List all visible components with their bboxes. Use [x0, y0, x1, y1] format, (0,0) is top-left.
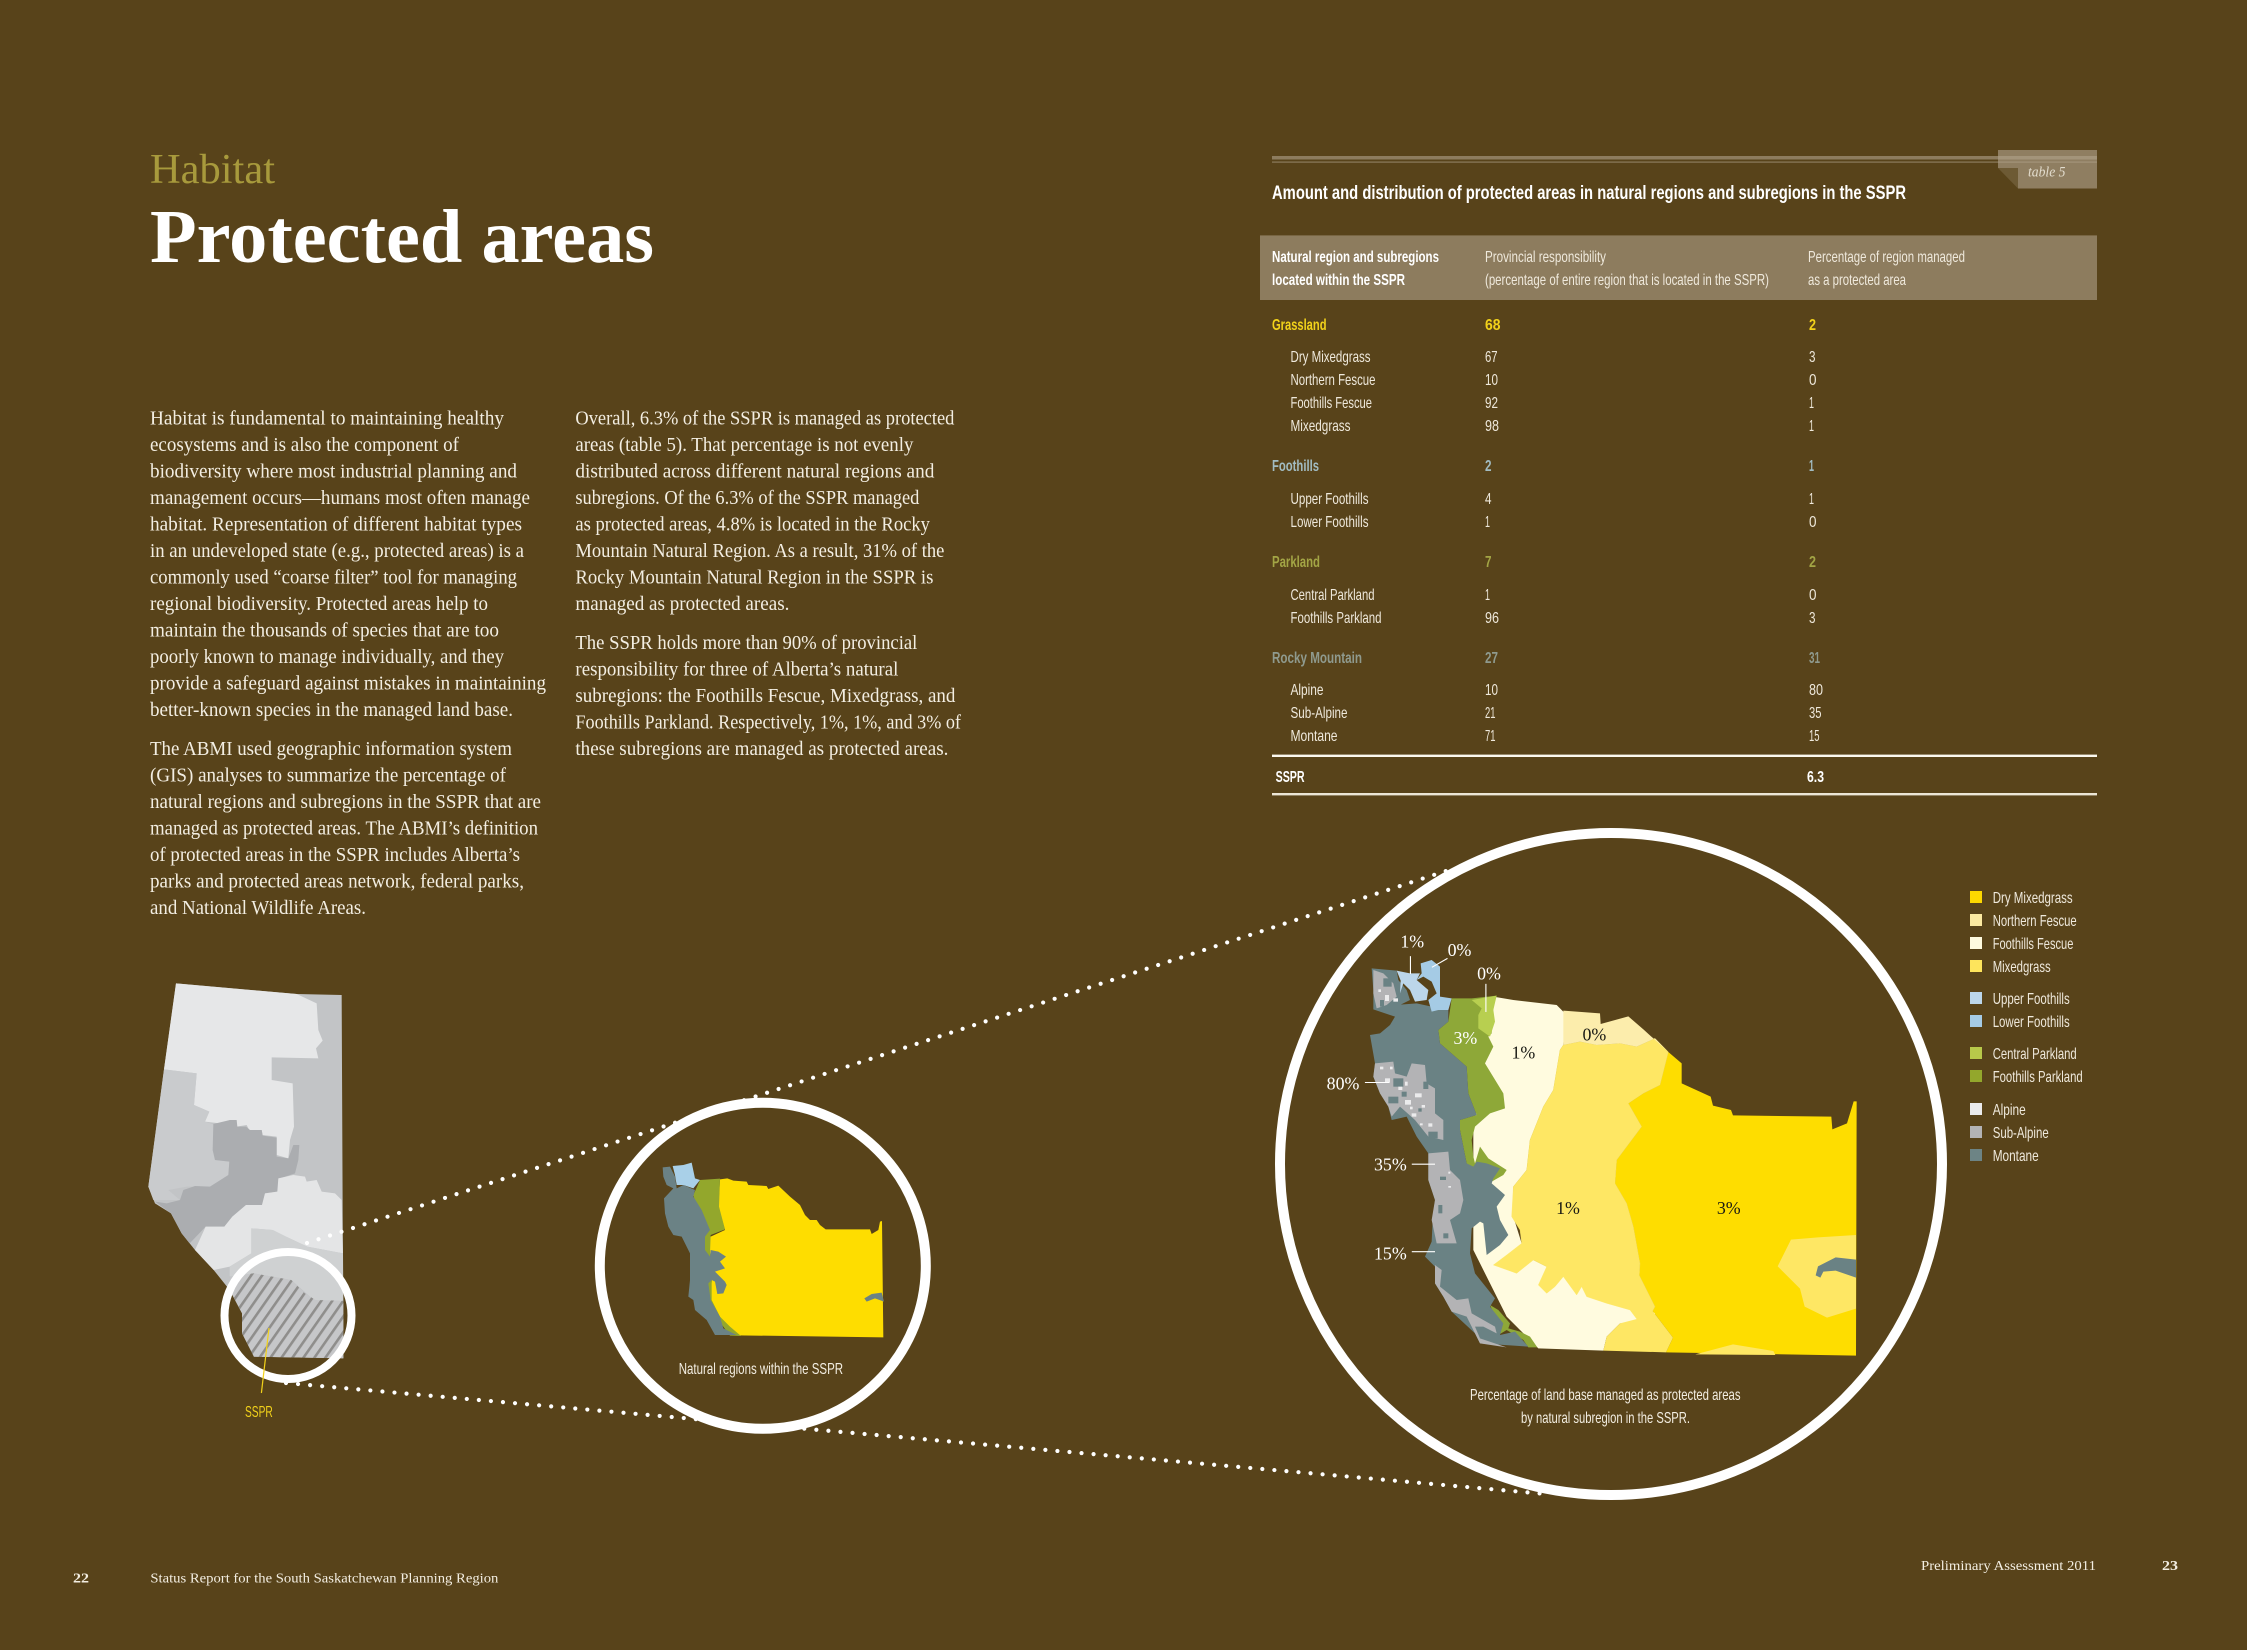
table group: Grassland: 1 — [1809, 395, 1814, 412]
region: Foothills Parkland — [1438, 996, 1507, 1183]
percentage labels: 0% — [1448, 940, 1472, 960]
region: Sub-Alpine — [1373, 970, 1507, 1347]
percentage labels: 0% — [1477, 963, 1501, 983]
text block: right column: Mountain Natural Region. As a result, 31% of the — [575, 541, 944, 562]
table group: Foothills: 1 — [1809, 458, 1814, 475]
table group: Rocky Mountain: 80 — [1809, 682, 1823, 699]
footer: left page: 22 — [73, 1570, 89, 1586]
table group: Grassland: 2 — [1809, 317, 1816, 334]
table header band: Provincial responsibility — [1485, 249, 1606, 266]
text block: left column: of protected areas in the SSPR includes Alberta’s — [150, 845, 520, 866]
percentage labels: 80% — [1327, 1074, 1360, 1094]
caption: percentage of land base: by natural subregion in the SSPR. — [1521, 1410, 1690, 1427]
map: Alberta province — [148, 983, 343, 1358]
table group: Parkland: Central Parkland — [1290, 587, 1374, 604]
caption: percentage of land base: Percentage of land base managed as protected areas — [1470, 1387, 1740, 1404]
table group: Grassland: Grassland — [1272, 317, 1326, 334]
text block: left column: ecosystems and is also the component of — [150, 435, 459, 456]
table group: Foothills: Foothills — [1272, 458, 1319, 475]
region: Mixedgrass — [1493, 1038, 1668, 1323]
circle panel: percent protected by subregion — [1280, 833, 1942, 1495]
map: natural regions within the SSPR — [663, 1163, 884, 1337]
text block: left column: provide a safeguard against mistakes in maintaining — [150, 673, 546, 694]
region: eastern Mixedgrass — [1778, 1235, 1856, 1318]
table group: Parkland: 3 — [1809, 610, 1816, 627]
text block: left column: managed as protected areas. The ABMI’s definition — [150, 818, 538, 840]
region: Central Parkland — [1472, 996, 1497, 1037]
text block: left column: parks and protected areas network, federal parks, — [150, 872, 524, 892]
text block: left column: commonly used “coarse filter” tool for managing — [150, 567, 517, 588]
caption: natural regions: Natural regions within the SSPR — [679, 1361, 843, 1378]
table header band: as a protected area — [1808, 272, 1906, 289]
table header band: (percentage of entire region that is located in the SSPR) — [1485, 272, 1769, 289]
footer: right page — [1921, 1558, 2178, 1573]
table group: Foothills: Upper Foothills — [1290, 491, 1368, 508]
dotted connector: lower — [286, 1383, 1546, 1494]
table group: Grassland — [1272, 317, 1817, 435]
dotted connector: upper — [307, 869, 1452, 1243]
table group: Parkland — [1272, 554, 1817, 627]
table group: Grassland: 3 — [1809, 349, 1816, 366]
legend: Montane — [1993, 1148, 2039, 1165]
text block: right column: as protected areas, 4.8% is located in the Rocky — [575, 514, 930, 535]
text block: right column: Overall, 6.3% of the SSPR is managed as protected — [575, 408, 955, 429]
legend: Foothills Fescue — [1993, 936, 2073, 953]
region: Northern Fescue south — [1603, 1311, 1673, 1352]
table group: Grassland: Mixedgrass — [1290, 418, 1350, 435]
region: Montane — [1370, 968, 1528, 1347]
table group: Rocky Mountain: 35 — [1809, 705, 1822, 722]
legend: Sub-Alpine — [1993, 1125, 2049, 1142]
caption: percentage of land base — [1470, 1387, 1740, 1427]
region: southern Mixedgrass sliver — [1695, 1344, 1775, 1355]
text block: right column: managed as protected areas. — [575, 594, 789, 615]
legend: Upper Foothills — [1993, 991, 2070, 1008]
region: Sub-Alpine gaps — [1380, 978, 1463, 1238]
percentage labels: 15% — [1374, 1244, 1407, 1264]
text block: left column: natural regions and subregions in the SSPR that are — [150, 792, 541, 813]
text block: right column: The SSPR holds more than 90% of provincial — [575, 633, 918, 654]
table group: Parkland: 7 — [1485, 554, 1492, 571]
region: Alpine — [1378, 989, 1451, 1188]
table group: Parkland: 0 — [1809, 587, 1817, 604]
legend: Mixedgrass — [1993, 959, 2051, 976]
table group: Parkland: 1 — [1485, 587, 1490, 604]
table title: Amount and distribution of protected areas in natural regions and subregions in the SSPR — [1272, 183, 1906, 204]
table group: Grassland: 92 — [1485, 395, 1498, 412]
table group: Rocky Mountain: 15 — [1809, 728, 1820, 745]
footer: right page: Preliminary Assessment 2011 — [1921, 1558, 2096, 1573]
table total row: SSPR: 6.3 — [1807, 769, 1824, 786]
text block: right column: distributed across different natural regions and — [575, 461, 935, 482]
region: Upper Foothills — [1397, 971, 1428, 1002]
table group: Foothills: 2 — [1485, 458, 1492, 475]
text block: left column: poorly known to manage individually, and they — [150, 647, 504, 668]
table group: Parkland: Foothills Parkland — [1290, 610, 1382, 627]
legend: Alpine — [1993, 1102, 2026, 1119]
table header band: Natural region and subregions — [1272, 249, 1439, 266]
percentage labels: 0% — [1582, 1025, 1606, 1045]
table group: Foothills: 1 — [1809, 491, 1814, 508]
table header band: Percentage of region managed — [1808, 249, 1965, 266]
leader: SSPR — [261, 1328, 269, 1393]
text block: left column: Habitat is fundamental to maintaining healthy — [150, 408, 504, 429]
footer: right page: 23 — [2162, 1558, 2178, 1573]
table group: Foothills: Lower Foothills — [1290, 514, 1368, 531]
text block: left column: habitat. Representation of different habitat types — [150, 514, 522, 535]
footer: left page: Status Report for the South Saskatchewan Planning Region — [150, 1570, 499, 1586]
percentage labels — [1327, 932, 1741, 1264]
table group: Foothills: 1 — [1485, 514, 1490, 531]
table group: Rocky Mountain: 10 — [1485, 682, 1498, 699]
text block: left column: biodiversity where most industrial planning and — [150, 461, 517, 482]
text block: left column — [150, 408, 546, 919]
percentage labels: 1% — [1511, 1042, 1535, 1062]
table total row: SSPR — [1272, 755, 2097, 795]
table group: Grassland: 68 — [1485, 317, 1501, 334]
region: Northern Fescue north — [1563, 1011, 1668, 1052]
title: Protected areas: Protected areas — [150, 195, 654, 279]
text block: right column: areas (table 5). That percentage is not evenly — [575, 435, 914, 456]
legend: Foothills Parkland — [1993, 1069, 2083, 1086]
text block: right column — [575, 408, 961, 760]
table group: Rocky Mountain: 31 — [1809, 650, 1820, 667]
circle: SSPR locator — [224, 1252, 352, 1379]
table group: Rocky Mountain: 21 — [1485, 705, 1496, 722]
text block: left column: in an undeveloped state (e.g., protected areas) is a — [150, 541, 524, 562]
text block: right column: responsibility for three of Alberta’s natural — [575, 660, 899, 680]
text block: left column: and National Wildlife Areas. — [150, 898, 366, 919]
region: Dry Mixedgrass — [1615, 1052, 1857, 1356]
table group: Rocky Mountain: Rocky Mountain — [1272, 650, 1362, 667]
legend: Central Parkland — [1993, 1046, 2077, 1063]
table group: Parkland: Parkland — [1272, 554, 1320, 571]
label: SSPR: SSPR — [245, 1404, 273, 1421]
table group: Grassland: Northern Fescue — [1290, 372, 1376, 389]
legend — [1970, 890, 2083, 1165]
text block: right column: Foothills Parkland. Respectively, 1%, 1%, and 3% of — [575, 712, 961, 734]
table group: Grassland: Foothills Fescue — [1290, 395, 1372, 412]
table group: Grassland: Dry Mixedgrass — [1290, 349, 1370, 366]
text block: left column: regional biodiversity. Protected areas help to — [150, 594, 488, 615]
table total row: SSPR: SSPR — [1276, 769, 1305, 786]
section label: Habitat: Habitat — [150, 147, 275, 193]
region: Foothills Fescue — [1473, 997, 1655, 1351]
table header band: located within the SSPR — [1272, 272, 1405, 289]
percentage labels: 3% — [1717, 1198, 1741, 1218]
text block: left column: maintain the thousands of species that are too — [150, 620, 499, 641]
table group: Grassland: 1 — [1809, 418, 1814, 435]
table top rules — [1272, 156, 1998, 163]
percentage labels: 1% — [1400, 932, 1424, 952]
percentage labels: 35% — [1374, 1154, 1407, 1174]
percentage labels: 1% — [1556, 1198, 1580, 1218]
table group: Grassland: 0 — [1809, 372, 1817, 389]
map: SSPR hatched area — [230, 1273, 343, 1358]
table group: Parkland: 2 — [1809, 554, 1816, 571]
text block: right column: these subregions are managed as protected areas. — [575, 739, 948, 760]
legend: Northern Fescue — [1993, 913, 2077, 930]
table group: Grassland: 67 — [1485, 349, 1498, 366]
region: Foothills Parkland south — [1490, 1305, 1537, 1347]
table group: Rocky Mountain: 27 — [1485, 650, 1498, 667]
table group: Parkland: 96 — [1485, 610, 1499, 627]
table group: Grassland: 98 — [1485, 418, 1499, 435]
table group: Rocky Mountain: 71 — [1485, 728, 1496, 745]
text block: right column: subregions. Of the 6.3% of the SSPR managed — [575, 488, 920, 509]
map: subregions — [1370, 960, 1857, 1356]
circle panel: natural regions — [600, 1103, 926, 1429]
text block: right column: Rocky Mountain Natural Region in the SSPR is — [575, 567, 933, 588]
text block: left column: (GIS) analyses to summarize the percentage of — [150, 766, 506, 786]
tag: table 5 — [1998, 150, 2097, 188]
tag: table 5: table 5 — [2028, 164, 2066, 180]
legend: Dry Mixedgrass — [1993, 890, 2073, 907]
table group: Rocky Mountain: Montane — [1290, 728, 1338, 745]
table header band — [1260, 235, 2097, 300]
region: Lower Foothills — [1417, 960, 1452, 1012]
table group: Rocky Mountain — [1272, 650, 1823, 745]
text block: right column: subregions: the Foothills Fescue, Mixedgrass, and — [575, 686, 956, 707]
table group: Foothills: 0 — [1809, 514, 1817, 531]
table group: Rocky Mountain: Alpine — [1290, 682, 1324, 699]
table group: Foothills: 4 — [1485, 491, 1492, 508]
legend: Lower Foothills — [1993, 1014, 2070, 1031]
table group: Grassland: 10 — [1485, 372, 1498, 389]
region: eastern Montane — [1816, 1257, 1856, 1278]
text block: left column: management occurs—humans most often manage — [150, 488, 530, 509]
percentage labels: 3% — [1453, 1028, 1477, 1048]
text block: left column: better-known species in the managed land base. — [150, 700, 513, 721]
text block: left column: The ABMI used geographic information system — [150, 739, 512, 760]
table group: Rocky Mountain: Sub-Alpine — [1290, 705, 1348, 722]
table group: Foothills — [1272, 458, 1817, 531]
